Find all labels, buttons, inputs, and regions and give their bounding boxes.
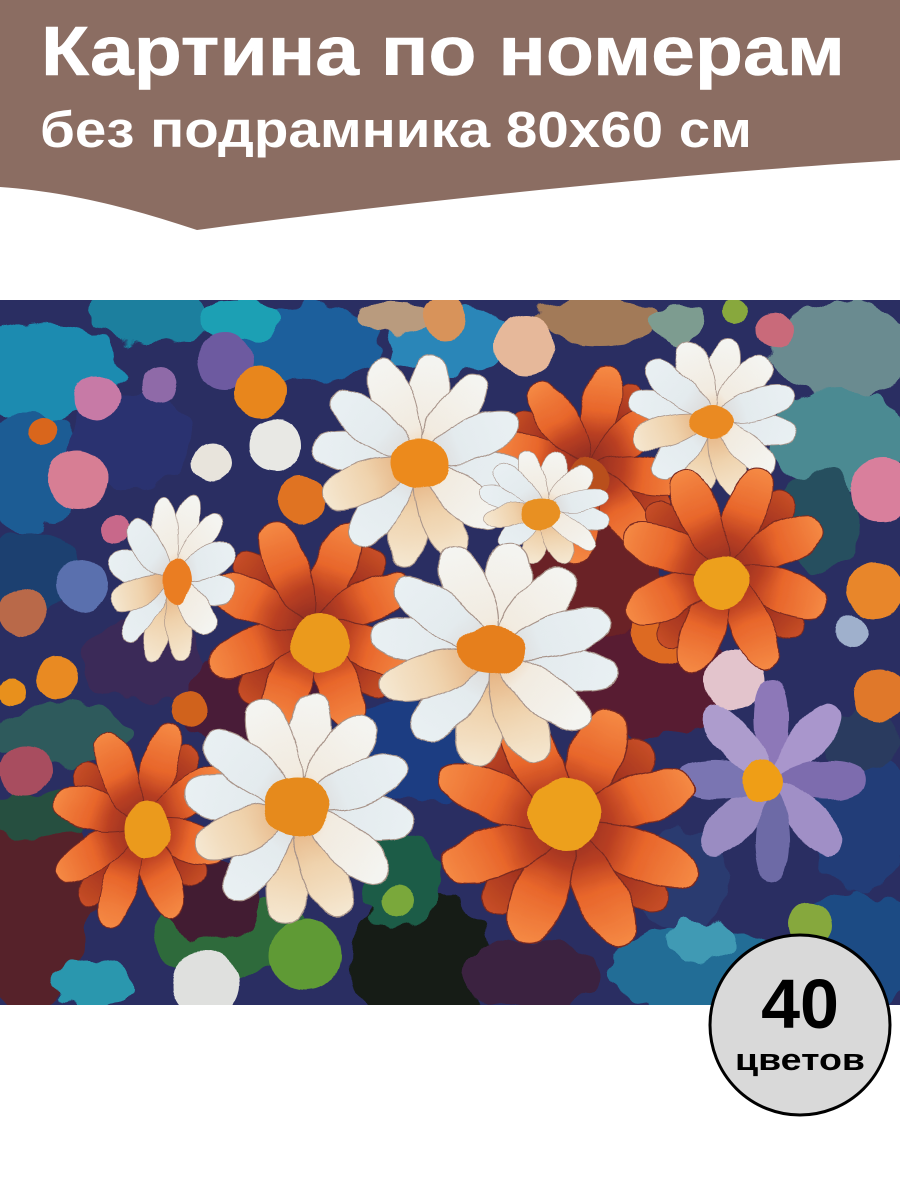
flower: orange lower left (22, 696, 258, 954)
flower: white upper right (611, 320, 813, 516)
flower: orange centre left (208, 521, 406, 725)
header banner (0, 0, 900, 230)
flower: purple (678, 678, 866, 882)
flower: orange upper right (496, 365, 672, 564)
flower: white left (89, 479, 255, 677)
flower: orange right (622, 467, 828, 674)
badge: 40 colours (710, 935, 890, 1115)
flower: white small centre right (479, 450, 610, 564)
small background blossoms (0, 296, 900, 1019)
title: Картина по номерам (41, 12, 845, 90)
flower: white centre (370, 542, 619, 767)
painting background colours (0, 280, 900, 1030)
painting: flower bouquet (0, 280, 900, 1030)
subtitle: без подрамника 80х60 см (40, 101, 752, 158)
flower: orange lower centre (438, 708, 700, 948)
flower: white lower left (184, 692, 414, 924)
badge label: цветов (735, 1042, 865, 1077)
badge number: 40 (761, 965, 839, 1043)
flower: white top centre (297, 340, 539, 582)
flowers (52, 338, 866, 948)
